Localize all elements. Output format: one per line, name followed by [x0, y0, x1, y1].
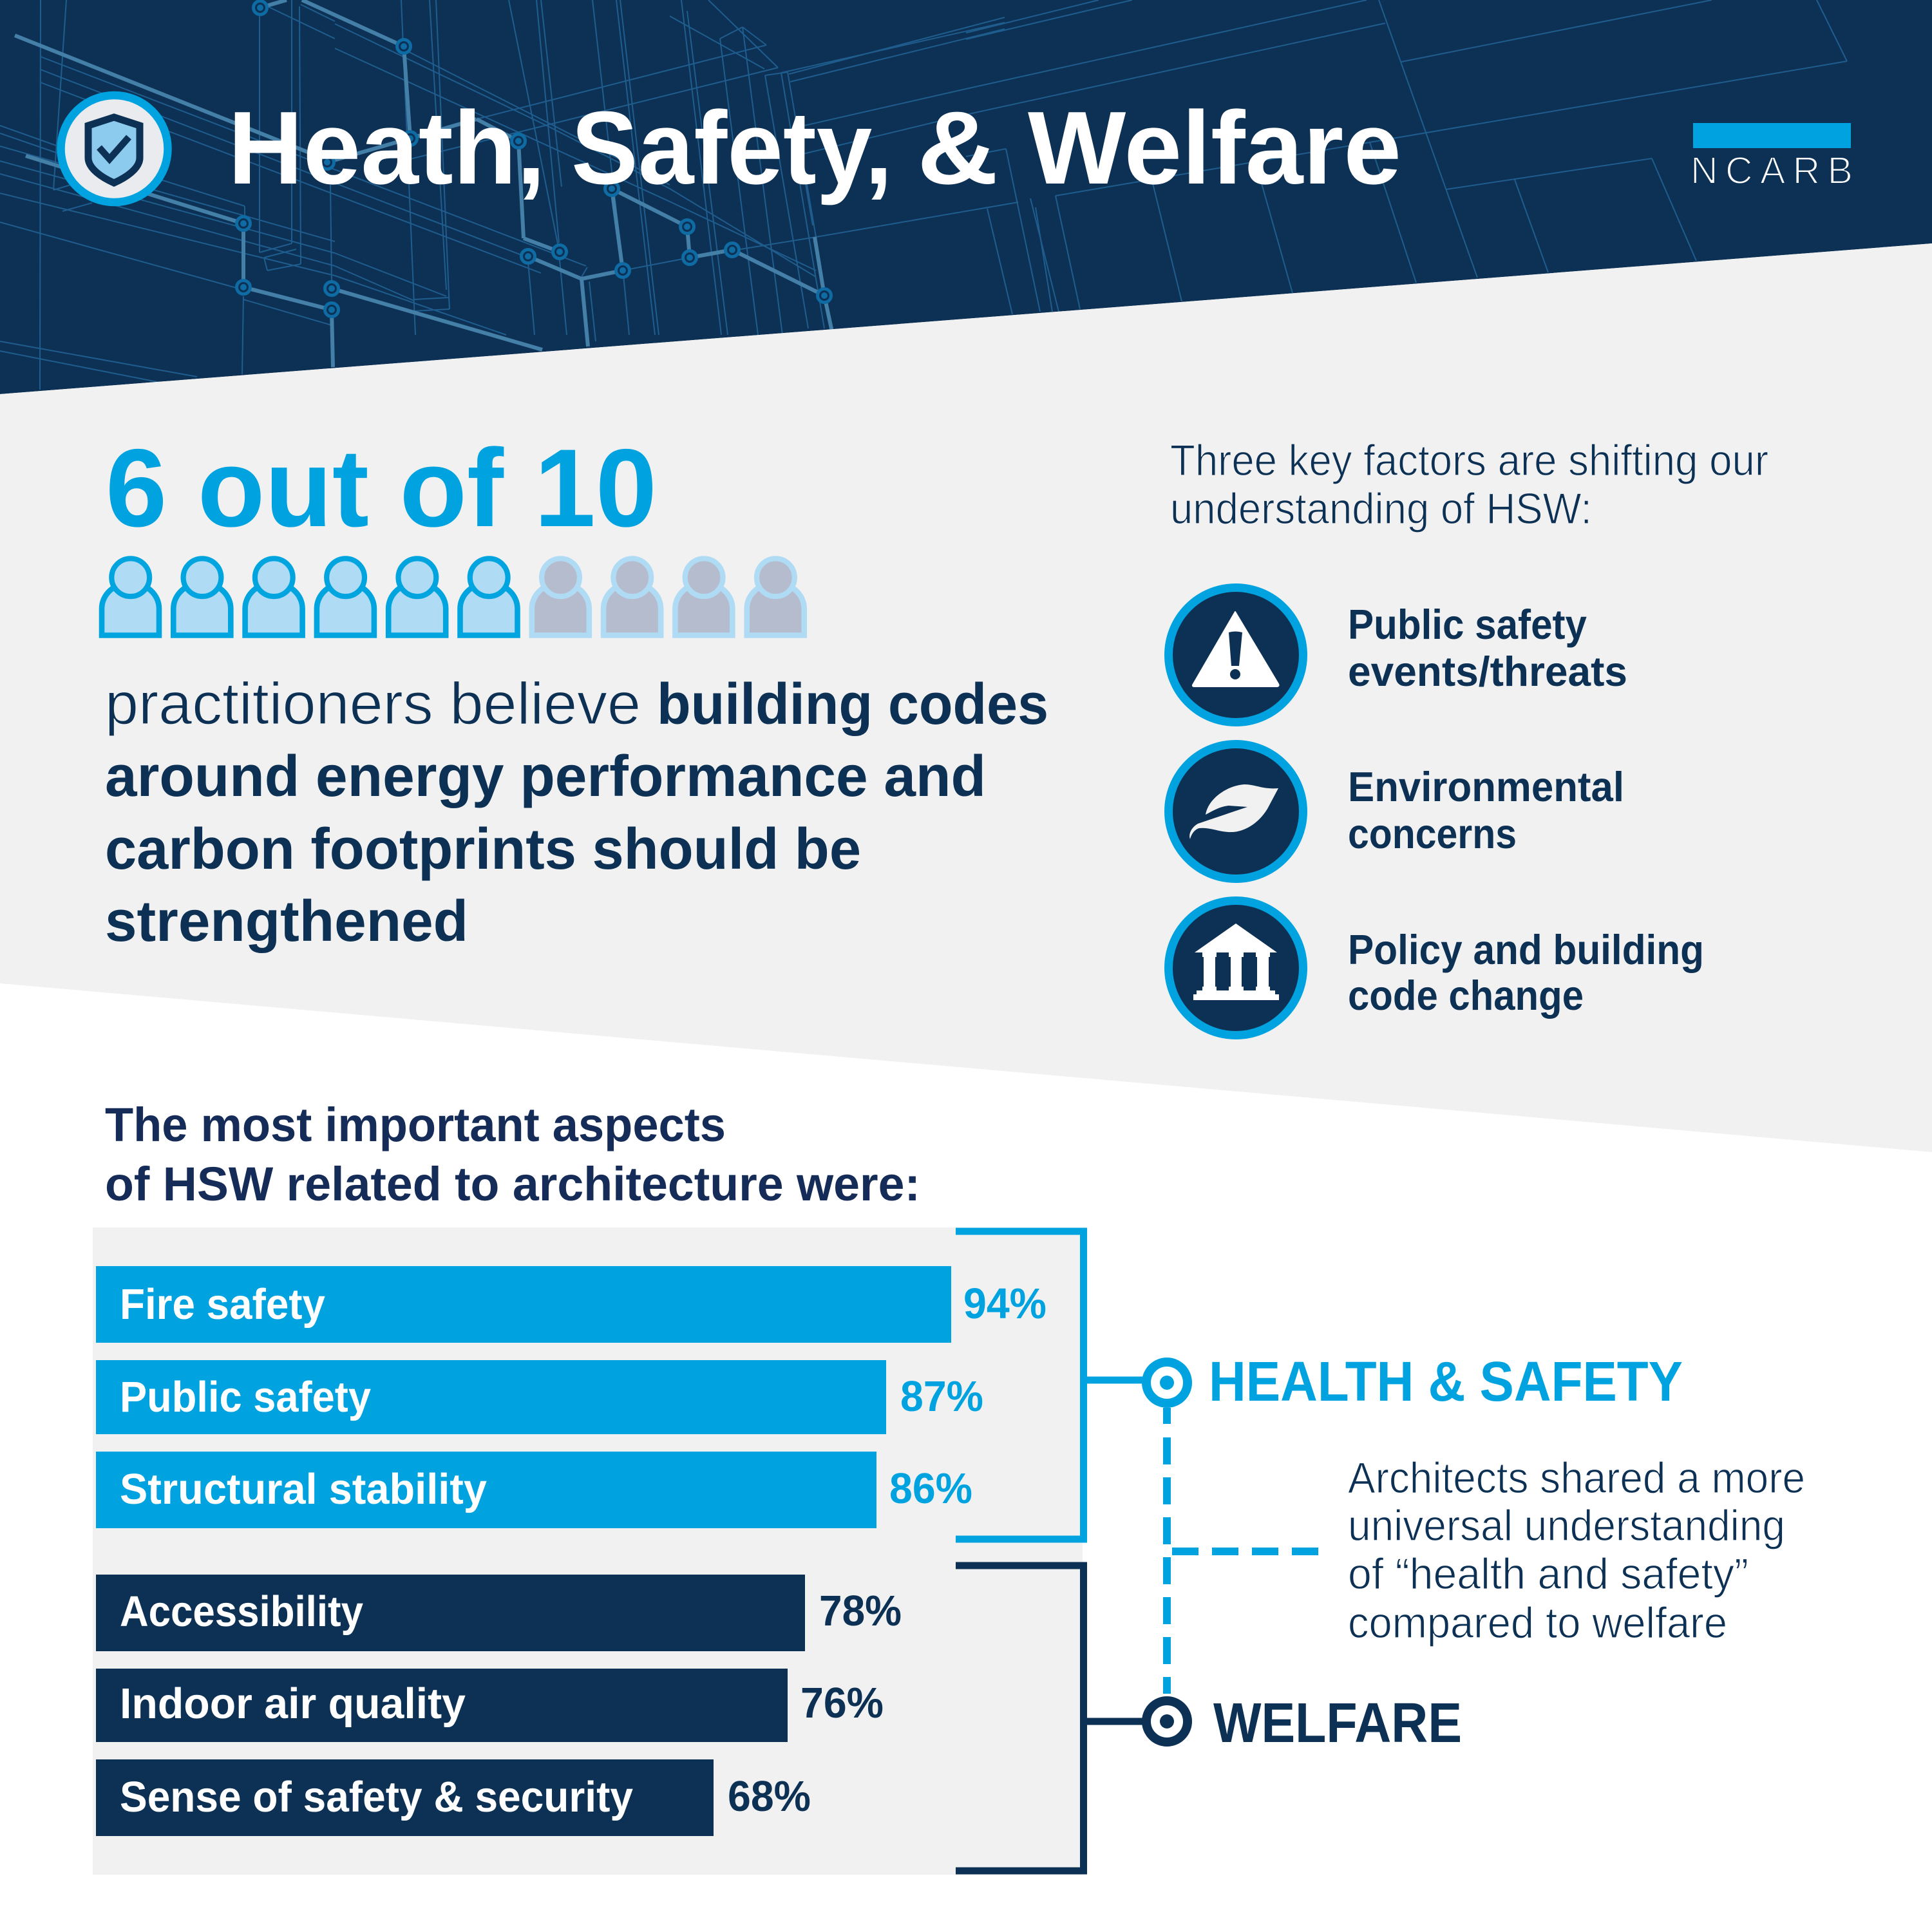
- label: environmental concerns: concerns: [1348, 810, 1517, 857]
- heading: HEALTH & SAFETY: HEALTH & SAFETY: [1209, 1350, 1683, 1413]
- title: Welfare: [1028, 90, 1401, 206]
- node: welfare: [1146, 1701, 1188, 1742]
- statement: practitioners believe: carbon footprints should be: [105, 817, 861, 882]
- panel: grey statistics band: [0, 243, 1932, 1152]
- logo: NCARB: NCARB: [1690, 149, 1853, 192]
- bracket: health and safety group: [956, 1231, 1144, 1539]
- statement: practitioners believe: [105, 671, 1048, 954]
- intro: three key factors: understanding of HSW:: [1170, 484, 1592, 533]
- label: policy and building code change: [1348, 926, 1704, 1019]
- title: Heath,: [228, 90, 545, 206]
- label: policy and building code change: code change: [1348, 972, 1584, 1019]
- title: Safety,: [571, 90, 893, 206]
- label: policy and building code change: Policy and building: [1348, 926, 1704, 973]
- icon: warning triangle: [1168, 587, 1303, 723]
- bracket: welfare group: [956, 1566, 1144, 1871]
- label: environmental concerns: [1348, 763, 1624, 857]
- intro: three key factors: Three key factors are shifting our: [1170, 436, 1768, 485]
- heading: most important aspects: of HSW related to architecture were:: [105, 1157, 920, 1211]
- node: health and safety: [1146, 1362, 1188, 1403]
- bar: indoor air quality 76%: 76%: [800, 1679, 884, 1727]
- text block: architects shared understanding: universal understanding: [1348, 1501, 1785, 1550]
- bar: sense of safety and security 68%: 68%: [728, 1772, 811, 1821]
- panel: header banner: [0, 0, 1932, 394]
- title: [228, 90, 1401, 206]
- intro: three key factors: [1170, 436, 1768, 533]
- bar: sense of safety and security 68%: Sense of safety & security: [120, 1773, 633, 1821]
- bar: public safety 87%: Public safety: [120, 1373, 371, 1421]
- bar: fire safety 94%: Fire safety: [120, 1280, 325, 1329]
- bar: fire safety 94%: [96, 1266, 1046, 1343]
- bar: indoor air quality 76%: [96, 1669, 884, 1742]
- text block: architects shared understanding: [1348, 1454, 1805, 1647]
- bar: structural stability 86%: Structural stability: [120, 1465, 487, 1513]
- heading: most important aspects: The most important aspects: [105, 1098, 726, 1151]
- bar: indoor air quality 76%: Indoor air quality: [120, 1680, 466, 1728]
- connector: dashed link: [1167, 1408, 1319, 1694]
- bar: accessibility 78%: 78%: [819, 1587, 902, 1635]
- bar: sense of safety and security 68%: [96, 1759, 811, 1836]
- icon: leaf: [1168, 744, 1303, 878]
- label: public safety events: events/threats: [1348, 648, 1627, 695]
- statement: practitioners believe: strengthened: [105, 889, 468, 954]
- pictogram: 6 of 10 people: [102, 558, 804, 635]
- bar: structural stability 86%: [96, 1452, 972, 1528]
- label: environmental concerns: Environmental: [1348, 763, 1624, 810]
- statement: practitioners believe: practitioners believe: [105, 671, 641, 737]
- bar: accessibility 78%: [96, 1575, 902, 1651]
- heading: WELFARE: WELFARE: [1213, 1692, 1462, 1754]
- statement: practitioners believe: around energy performance and: [105, 744, 986, 809]
- bar: public safety 87%: [96, 1360, 983, 1434]
- bar: accessibility 78%: Accessibility: [120, 1587, 363, 1636]
- label: public safety events: [1348, 601, 1627, 695]
- logo: NCARB: [1690, 123, 1853, 192]
- bar: public safety 87%: 87%: [900, 1372, 983, 1421]
- text block: architects shared understanding: compared to welfare: [1348, 1598, 1727, 1647]
- bar: structural stability 86%: 86%: [889, 1464, 972, 1513]
- heading: most important aspects: [105, 1098, 920, 1211]
- icon: shield with check mark: [61, 95, 167, 202]
- label: public safety events: Public safety: [1348, 601, 1587, 648]
- text block: architects shared understanding: of “health and safety”: [1348, 1549, 1748, 1598]
- title: &: [917, 90, 998, 206]
- text block: architects shared understanding: Architects shared a more: [1348, 1454, 1805, 1502]
- stat headline: 6 out of 10: 6 out of 10: [106, 426, 657, 550]
- icon: civic building: [1168, 900, 1303, 1036]
- panel: bar chart: [93, 1227, 1083, 1875]
- statement: practitioners believe: building codes: [657, 672, 1048, 737]
- bar: fire safety 94%: 94%: [963, 1280, 1046, 1328]
